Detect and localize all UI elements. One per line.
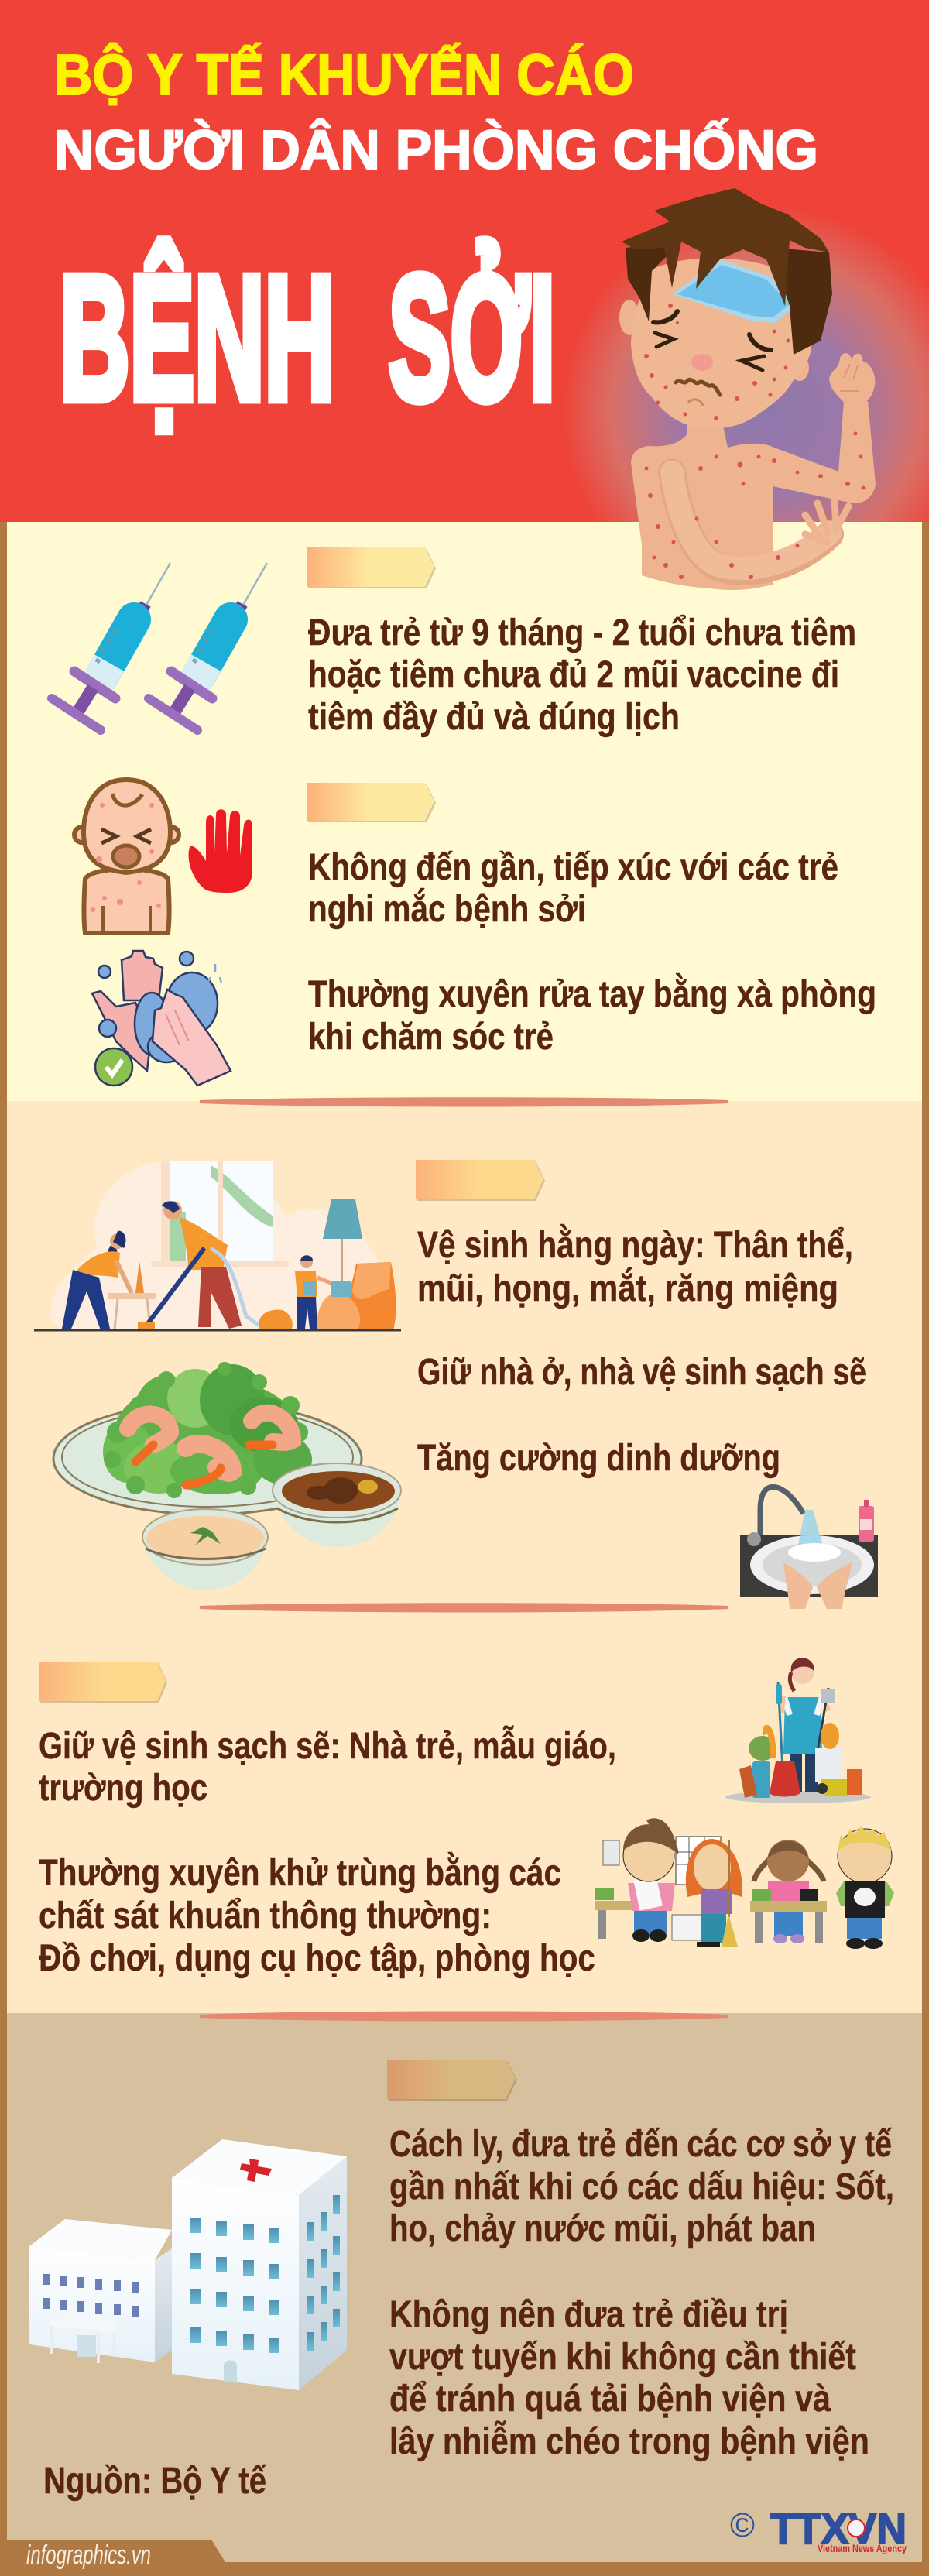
logo: TTXVN: © <box>730 2506 755 2544</box>
bowl: stew <box>273 1463 401 1547</box>
scratching arm <box>672 472 830 571</box>
text: isolation <box>389 2124 894 2462</box>
source: Nguồn: Bộ Y tế <box>43 2461 266 2502</box>
text: vaccination: tiêm đầy đủ và đúng lịch <box>308 697 680 738</box>
text: school hygiene: Giữ vệ sinh sạch sẽ: Nhà trẻ, mẫu giáo, <box>39 1725 616 1767</box>
panel: vaccination and contact <box>7 522 922 1101</box>
main title: SỞI <box>389 240 555 437</box>
eyebrows and eyes <box>653 311 771 370</box>
sick child glow <box>570 215 929 522</box>
child <box>295 1255 333 1329</box>
title line 2: NGƯỜI DÂN PHÒNG CHỐNG <box>54 119 818 181</box>
tag 5 <box>387 2060 517 2101</box>
text: daily hygiene <box>417 1223 866 1479</box>
main title: BỆNH <box>60 240 334 437</box>
text: no contact <box>308 847 838 930</box>
illustration: cleaner with supplies <box>725 1658 871 1803</box>
fist <box>829 353 875 404</box>
icon: sick baby <box>74 780 179 933</box>
tag 2 <box>307 783 436 822</box>
text: daily hygiene: Vệ sinh hằng ngày: Thân thể, <box>417 1223 853 1266</box>
body <box>631 401 876 590</box>
text: no contact: Không đến gần, tiếp xúc với các trẻ <box>308 847 838 888</box>
illustration: hospital <box>29 2139 347 2390</box>
footer tab <box>0 2540 929 2576</box>
face <box>631 258 811 428</box>
hospital cross <box>240 2159 272 2182</box>
tag 4 <box>39 1662 167 1703</box>
text: isolation: ho, chảy nước mũi, phát ban <box>389 2208 816 2249</box>
ice pack <box>672 259 797 323</box>
text: school hygiene <box>39 1725 616 1979</box>
icon: stop hand <box>189 809 252 893</box>
child 1 <box>623 1823 678 1942</box>
armchair <box>317 1262 396 1330</box>
tag 1 <box>307 547 436 588</box>
text: school hygiene: trường học <box>39 1768 207 1809</box>
lamp <box>323 1199 362 1309</box>
illustration: family cleaning <box>34 1161 401 1332</box>
logo: TTXVN: TTXVN <box>770 2504 907 2553</box>
tag 3 <box>416 1160 545 1201</box>
nose <box>691 354 713 371</box>
child 4 <box>836 1826 894 1949</box>
text: vaccination: hoặc tiêm chưa đủ 2 mũi vaccine đi <box>308 654 839 695</box>
illustration: children cleaning classroom <box>595 1823 894 1949</box>
text: school hygiene: chất sát khuẩn thông thường: <box>39 1895 492 1936</box>
text: hand washing: khi chăm sóc trẻ <box>308 1017 554 1058</box>
illustration: washing hands in sink <box>740 1487 878 1609</box>
panel: header <box>0 0 929 522</box>
dividers <box>200 1097 728 2021</box>
woman <box>62 1231 156 1330</box>
text: isolation: Không nên đưa trẻ điều trị <box>389 2294 788 2335</box>
child 2 with broom <box>686 1839 742 1947</box>
text: no contact: nghi mắc bệnh sởi <box>308 887 586 930</box>
icon: hand washing <box>92 951 231 1086</box>
footer tab: infographics.vn <box>26 2540 151 2570</box>
text: vaccination <box>308 612 856 738</box>
books <box>672 1915 701 1940</box>
text: school hygiene: Đồ chơi, dụng cụ học tập, phòng học <box>39 1938 595 1979</box>
panel: home hygiene and school <box>7 1101 922 2013</box>
title line 1: BỘ Y TẾ KHUYẾN CÁO <box>54 43 634 107</box>
bowl: soup <box>142 1509 268 1590</box>
man <box>138 1201 293 1330</box>
ears <box>619 300 639 335</box>
panel: isolation and hospital <box>7 2013 922 2562</box>
hair <box>626 242 832 355</box>
illustration: sick boy <box>619 188 876 590</box>
shrimp <box>128 1413 293 1485</box>
mouth <box>676 379 720 395</box>
text: hand washing <box>308 972 876 1058</box>
text: isolation: vượt tuyến khi không cần thiết <box>389 2337 856 2378</box>
lettuce <box>103 1362 312 1498</box>
rash spots <box>644 304 866 579</box>
text: daily hygiene: Tăng cường dinh dưỡng <box>417 1438 780 1479</box>
icon: syringes <box>52 563 267 730</box>
text: school hygiene: Thường xuyên khử trùng bằng các <box>39 1851 561 1894</box>
child 3 <box>750 1840 827 1943</box>
illustration: food <box>53 1362 401 1590</box>
text: isolation: để tránh quá tải bệnh viện và <box>389 2379 831 2420</box>
text: daily hygiene: mũi, họng, mắt, răng miệng <box>417 1267 838 1309</box>
